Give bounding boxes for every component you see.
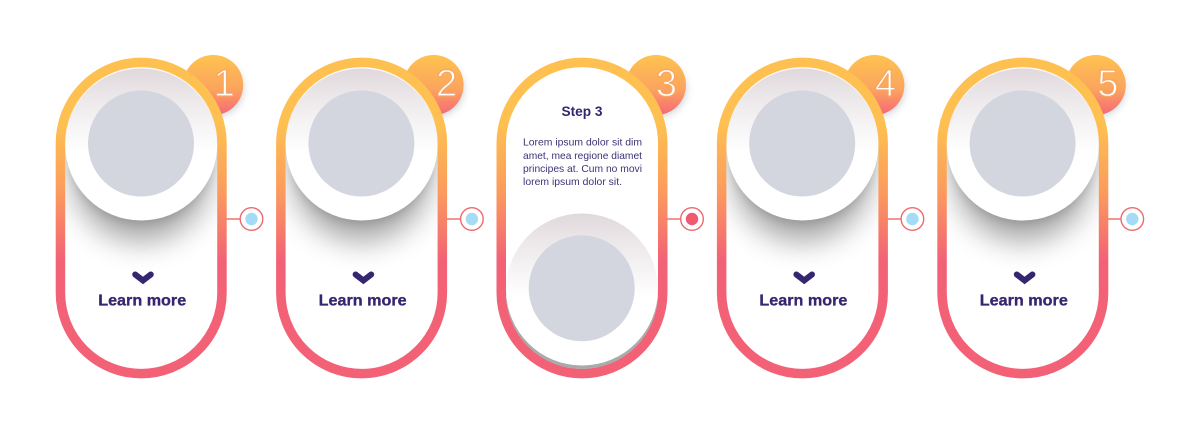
step description: Lorem ipsum dolor sit dim	[523, 136, 642, 148]
drop shadow 2	[287, 73, 437, 241]
learn more 4: Learn more	[759, 292, 848, 310]
capsule outline 3	[501, 62, 663, 374]
number badge 3: 3	[656, 63, 677, 105]
number badge 5	[1066, 55, 1126, 116]
capsule outline 4	[722, 62, 883, 374]
number badge 2: 2	[436, 63, 457, 105]
image disc 5	[947, 68, 1099, 220]
image disc 4	[726, 68, 878, 220]
image disc 1	[65, 68, 217, 220]
lowered disc shadow	[506, 291, 658, 369]
image disc 2	[286, 68, 438, 220]
connector and dot 4	[887, 208, 924, 230]
panel: step 2	[281, 55, 483, 374]
step description: amet, mea regione diamet	[523, 150, 642, 162]
capsule outline 1	[60, 62, 222, 374]
drop shadow 5	[948, 73, 1098, 241]
connector and dot 1	[226, 208, 263, 230]
drop shadow 1	[66, 73, 216, 241]
number badge 5: 5	[1097, 63, 1118, 105]
number badge 2	[404, 55, 464, 116]
capsule outline 2	[281, 62, 442, 374]
connector and dot 5	[1108, 208, 1144, 230]
connector and dot 2	[447, 208, 483, 230]
chevron 1	[135, 274, 151, 280]
panel: step 4	[722, 55, 924, 374]
connector and dot 3	[667, 208, 703, 230]
number badge 4	[844, 55, 904, 116]
panel: step 5	[942, 55, 1144, 374]
step description: lorem ipsum dolor sit.	[523, 176, 622, 188]
learn more 2: Learn more	[319, 292, 407, 310]
step heading: Step 3	[562, 103, 603, 119]
number badge 4: 4	[875, 63, 896, 105]
chevron 5	[1017, 274, 1032, 280]
learn more 5: Learn more	[980, 292, 1068, 310]
chevron 2	[356, 274, 371, 280]
capsule outline 5	[942, 62, 1104, 374]
chevron 4	[796, 274, 812, 280]
panel: step 1	[60, 55, 263, 374]
panel: step 3 (active)	[501, 55, 703, 374]
step description	[523, 136, 642, 188]
learn more 1: Learn more	[98, 292, 186, 310]
step description: principes at. Cum no movi	[523, 163, 642, 175]
number badge 3	[626, 55, 686, 116]
number badge 1	[183, 55, 243, 116]
number badge 1: 1	[214, 63, 235, 105]
drop shadow 4	[727, 73, 877, 241]
image disc 3	[506, 214, 658, 366]
